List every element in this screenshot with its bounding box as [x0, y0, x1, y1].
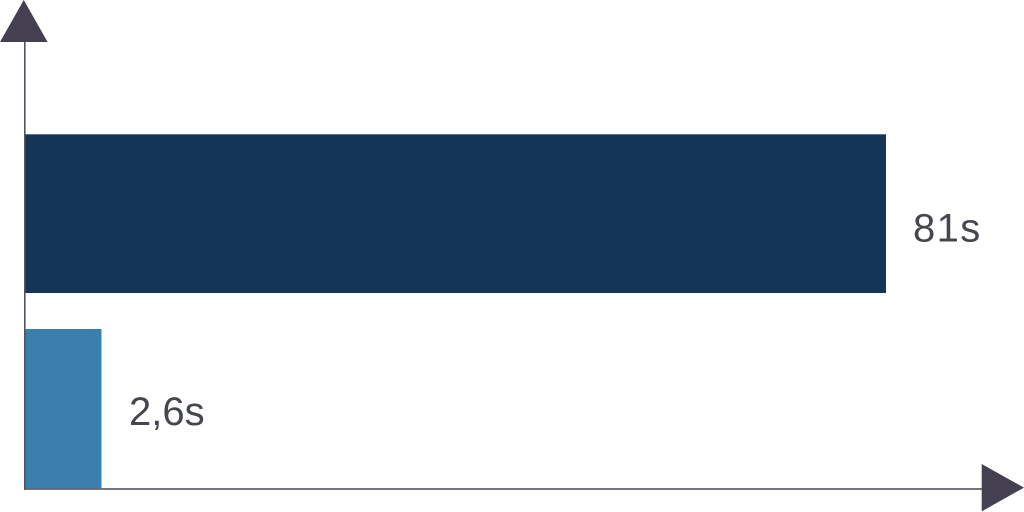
label: 81s: 81s [913, 206, 982, 250]
bar: 2,6s [26, 329, 102, 488]
x axis line [24, 488, 984, 490]
y axis arrow [0, 0, 48, 42]
bar: 81s [26, 134, 886, 293]
y axis line [24, 40, 26, 490]
x axis arrow [982, 464, 1024, 511]
label: 2,6s: 2,6s [129, 390, 205, 434]
